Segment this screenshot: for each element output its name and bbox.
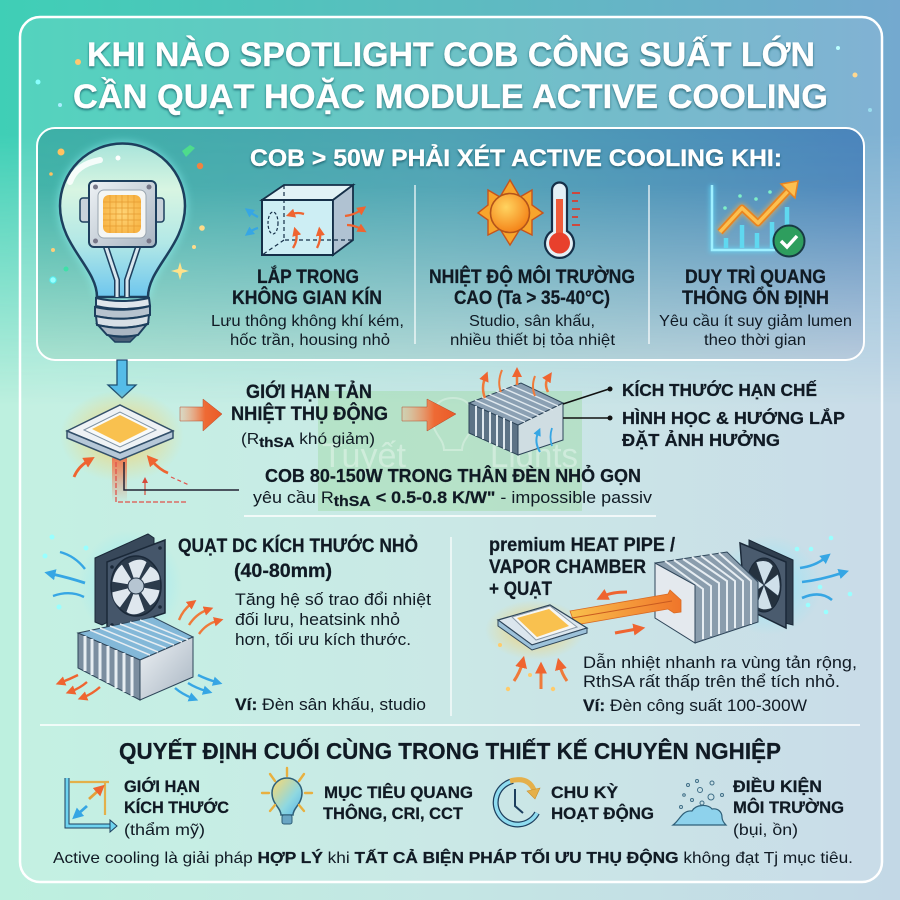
text: stable luminous flux: THÔNG ỔN ĐỊNH: [682, 287, 829, 309]
text: passive cooling limit: (R: [241, 431, 258, 448]
text: heat pipe solution: premium HEAT PIPE /: [489, 535, 676, 556]
text: heat pipe solution: VAPOR CHAMBER: [489, 557, 646, 578]
text: COB 80-150W requirement: - impossible passiv: [500, 488, 644, 507]
text: size limit: [124, 777, 229, 839]
text: stable luminous flux: theo thời gian: [704, 332, 806, 349]
text: enclosed space: LẮP TRONG: [257, 266, 359, 288]
text: enclosed space: Lưu thông không khí kém,: [211, 313, 404, 330]
text: small DC fan: Ví: Đèn sân khấu, studio: [235, 695, 426, 714]
text: operating cycle: HOẠT ĐỘNG: [551, 804, 654, 823]
text: environmental conditions: MÔI TRƯỜNG: [733, 798, 844, 817]
text: operating cycle: CHU KỲ: [551, 783, 619, 802]
icon: light bulb with COB chip: [60, 144, 185, 342]
watermark: Tuyết: [322, 437, 407, 475]
text: luminous targets: MỤC TIÊU QUANG: [324, 783, 473, 802]
callouts: heatsink limits: HÌNH HỌC & HƯỚNG LẮP: [622, 407, 845, 428]
text: high ambient temperature: nhiều thiết bị tỏa nhiệt: [450, 332, 616, 349]
panel: active cooling conditions: [37, 128, 864, 360]
text: heat pipe solution: Dẫn nhiệt nhanh ra vùng tản rộng,: [583, 653, 857, 672]
text: enclosed space: hốc trần, housing nhỏ: [230, 332, 390, 349]
text: size limit: KÍCH THƯỚC: [124, 798, 229, 817]
text: COB 80-150W requirement: yêu cầu R: [253, 488, 330, 507]
text: small DC fan: hơn, tối ưu kích thước.: [235, 630, 411, 649]
watermark: [318, 391, 582, 511]
decorative sparkles around bulb: [49, 145, 205, 283]
panel heading: COB > 50W PHẢI XÉT ACTIVE COOLING KHI:: [250, 143, 782, 172]
icon: chart with rising arrow and check: [712, 181, 804, 256]
text: heat pipe solution: [489, 535, 857, 715]
callouts: heatsink limits: ĐẶT ẢNH HƯỞNG: [622, 429, 780, 450]
text: passive cooling limit: NHIỆT THỤ ĐỘNG: [231, 403, 388, 425]
heading: final decision: QUYẾT ĐỊNH CUỐI CÙNG TRONG THIẾT KẾ CHUYÊN NGHIỆP: [119, 737, 781, 764]
text: operating cycle: [551, 783, 654, 823]
text: environmental conditions: ĐIỀU KIỆN: [733, 777, 822, 796]
text: heat pipe solution: + QUẠT: [489, 579, 552, 600]
text: environmental conditions: (bụi, ồn): [733, 822, 798, 839]
text: environmental conditions: [733, 777, 844, 839]
closing statement: Active cooling là giải pháp HỢP LÝ khi TẤT CẢ BIỆN PHÁP TỐI ƯU THỤ ĐỘNG không đạt Tj mục tiêu.: [53, 847, 853, 867]
text: passive cooling limit: GIỚI HẠN TẢN: [246, 381, 372, 403]
text: COB 80-150W requirement: thSA: [334, 493, 371, 510]
text: small DC fan: đối lưu, heatsink nhỏ: [235, 610, 400, 629]
icon: light bulb colour targets: [262, 768, 312, 824]
text: passive cooling limit: khó giảm): [294, 431, 375, 448]
text: heat pipe solution: Ví: Đèn công suất 100-300W: [583, 696, 807, 715]
text: luminous targets: [323, 783, 473, 823]
callouts: heatsink limits: [563, 379, 845, 450]
title: [73, 35, 828, 116]
icon: dust and environment: [673, 780, 726, 825]
text: size limit: GIỚI HẠN: [124, 777, 200, 796]
text: high ambient temperature: Studio, sân khấu,: [469, 313, 595, 330]
icon: size limit: [67, 778, 117, 832]
icon: passive heatsink: [469, 370, 563, 455]
icon: operating cycle: [496, 780, 540, 824]
icon: sun and thermometer: [478, 180, 580, 258]
text: enclosed space: [211, 266, 404, 349]
icon: enclosed box with heat: [250, 185, 361, 255]
watermark: Lights: [490, 437, 578, 475]
text: small DC fan: (40-80mm): [234, 561, 332, 582]
text: COB 80-150W requirement: [253, 465, 653, 510]
text: stable luminous flux: Yêu cầu ít suy giảm lumen: [659, 313, 852, 330]
text: high ambient temperature: [429, 266, 635, 349]
title: CẦN QUẠT HOẶC MODULE ACTIVE COOLING: [73, 78, 828, 116]
text: passive cooling limit: [231, 381, 388, 450]
icon: DC fan on heatsink: [42, 530, 217, 700]
text: small DC fan: QUẠT DC KÍCH THƯỚC NHỎ: [178, 535, 418, 557]
text: enclosed space: KHÔNG GIAN KÍN: [232, 287, 382, 309]
text: heat pipe solution: RthSA rất thấp trên thể tích nhỏ.: [583, 672, 840, 691]
callouts: heatsink limits: KÍCH THƯỚC HẠN CHẾ: [622, 379, 817, 400]
text: passive cooling limit: thSA: [259, 434, 294, 450]
icon: heat pipe with fan: [485, 535, 852, 691]
text: small DC fan: [178, 535, 431, 714]
text: stable luminous flux: DUY TRÌ QUANG: [685, 266, 826, 288]
text: COB 80-150W requirement: < 0.5-0.8 K/W": [371, 488, 495, 507]
text: high ambient temperature: CAO (Ta > 35-40°C): [454, 288, 610, 309]
text: small DC fan: Tăng hệ số trao đổi nhiệt: [235, 590, 431, 609]
text: stable luminous flux: [659, 266, 852, 349]
arrow: to heatsink: [402, 399, 456, 431]
arrow: panel down to COB: [108, 360, 136, 398]
arrow: COB to passive limit: [180, 399, 222, 431]
title: KHI NÀO SPOTLIGHT COB CÔNG SUẤT LỚN: [87, 35, 815, 74]
icon: COB chip with heat: [60, 390, 239, 502]
text: COB 80-150W requirement: COB 80-150W TRONG THÂN ĐÈN NHỎ GỌN: [265, 465, 641, 486]
text: size limit: (thẩm mỹ): [124, 821, 205, 839]
text: high ambient temperature: NHIỆT ĐỘ MÔI TRƯỜNG: [429, 266, 635, 288]
text: luminous targets: THÔNG, CRI, CCT: [323, 804, 464, 823]
